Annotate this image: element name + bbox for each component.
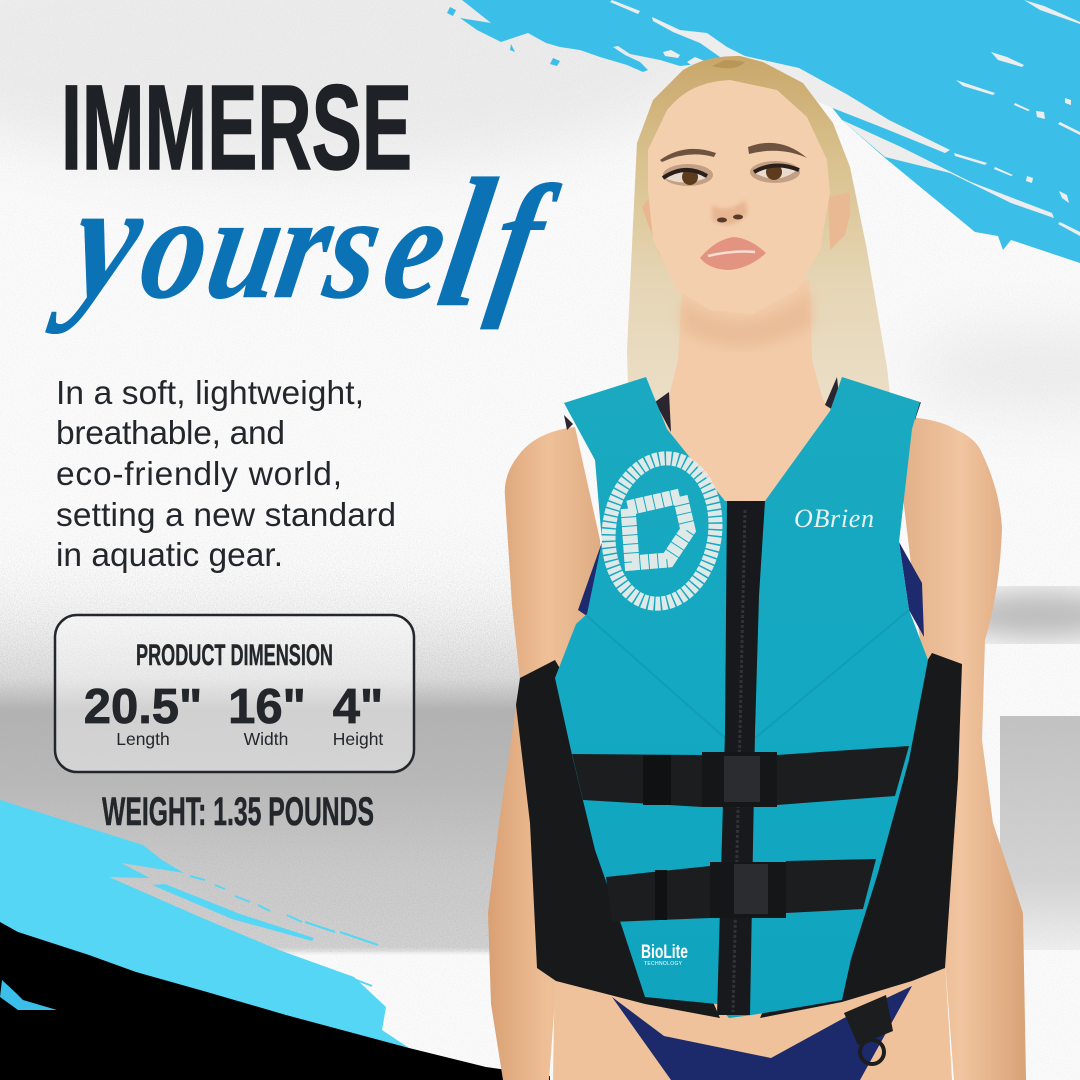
left black panel	[516, 660, 720, 1018]
weight label: WEIGHT: 1.35 POUNDS	[102, 790, 374, 834]
biolite badge	[641, 942, 688, 967]
zipper	[717, 501, 765, 1015]
parted hair top	[712, 60, 745, 68]
intro paragraph: eco-friendly world,	[56, 456, 342, 493]
panel: product dimension	[55, 615, 414, 772]
right black panel	[760, 653, 962, 1018]
intro paragraph: In a soft, lightweight,	[56, 375, 364, 412]
nose shadow	[712, 200, 748, 225]
length value: 20.5"	[84, 680, 202, 734]
vest brand script: OBrien	[794, 504, 874, 533]
intro paragraph: breathable, and	[56, 415, 285, 452]
torso	[553, 960, 952, 1080]
neck shadow	[682, 290, 812, 346]
width value: 16"	[228, 680, 306, 734]
inner collar	[564, 377, 921, 432]
height value: Height	[333, 729, 383, 749]
heading: IMMERSE: IMMERSE	[61, 59, 412, 195]
height value: 4"	[333, 680, 383, 734]
brush: bottom left blue and black	[0, 800, 550, 1080]
eyes and brows	[660, 143, 807, 186]
face	[648, 80, 830, 314]
length value: Length	[116, 729, 170, 749]
lower strap and buckle	[606, 859, 876, 922]
vest front	[555, 377, 928, 1018]
neck and chest	[640, 280, 850, 510]
dimension heading: PRODUCT DIMENSION	[136, 639, 333, 672]
heading: yourself: y	[45, 146, 158, 334]
swimsuit bottom	[612, 986, 912, 1080]
heading: yourself: u	[196, 165, 296, 330]
swimsuit straps	[578, 542, 924, 637]
heading: yourself: o	[130, 165, 223, 330]
left ear	[642, 195, 660, 257]
heading: yourself: l	[426, 142, 506, 346]
upper strap and buckle	[572, 746, 909, 807]
biolite badge: BioLite	[641, 942, 688, 963]
width value: Width	[244, 729, 288, 749]
intro paragraph: in aquatic gear.	[56, 537, 283, 574]
right arm	[895, 417, 1026, 1080]
brush: top right blue	[447, 0, 1080, 263]
vest logo	[599, 451, 725, 611]
heading: yourself: f	[480, 154, 568, 330]
hair	[627, 56, 890, 410]
biolite badge: TECHNOLOGY	[644, 961, 683, 967]
left arm	[488, 427, 610, 1080]
model photo illustration	[488, 56, 1026, 1080]
right ear	[828, 192, 850, 250]
intro paragraph	[56, 375, 396, 574]
heading: yourself: s	[314, 165, 394, 330]
intro paragraph: setting a new standard	[56, 497, 396, 534]
lips	[700, 237, 766, 270]
heading: yourself: e	[373, 165, 459, 330]
heading: yourself: r	[266, 165, 346, 330]
d-ring strap	[844, 995, 893, 1064]
vest seams	[587, 610, 909, 738]
